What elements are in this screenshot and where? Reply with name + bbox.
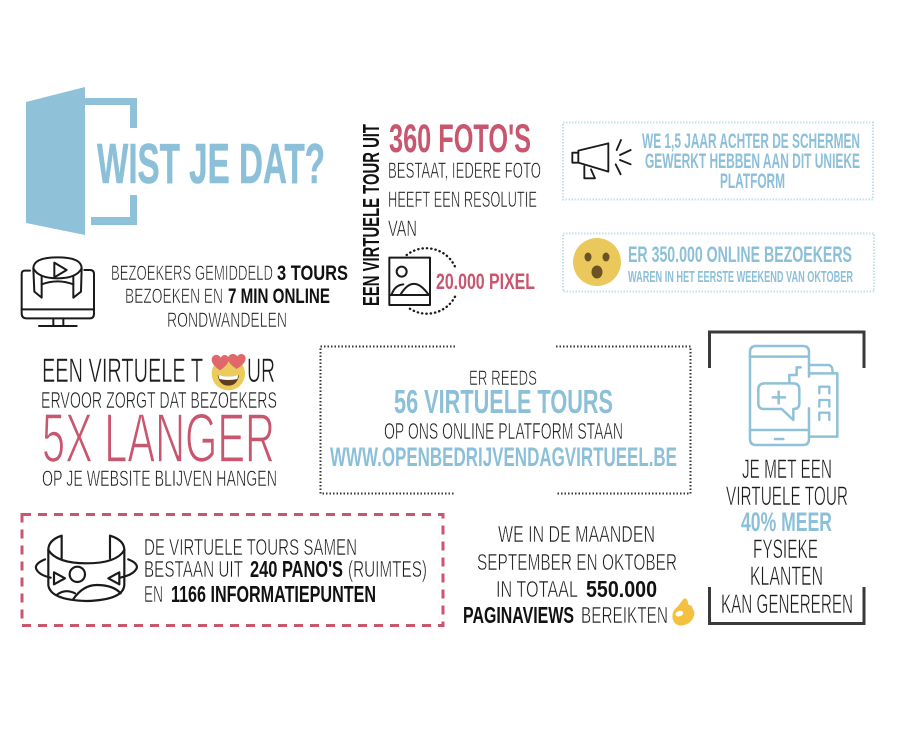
text: een virtuele tour block: EEN VIRTUELE T (42, 352, 203, 390)
panel: online visitors (563, 234, 874, 292)
text: pageviews (463, 521, 677, 628)
icon: phone with chat bubble (750, 346, 837, 445)
text: 360 photos: 360 FOTO'S (389, 117, 531, 161)
text: een virtuele tour block: 5X LANGER (42, 399, 275, 477)
panel: pano's and info points: (RUIMTES) (348, 556, 427, 582)
text: visitors average: BEZOEKERS GEMIDDELD (111, 262, 273, 285)
panel: pano's and info points: 240 PANO'S (250, 556, 343, 582)
vertical heading: een virtuele tour uit: EEN VIRTUELE TOUR UIT (358, 124, 384, 306)
icon: 360 panorama band (36, 536, 137, 601)
text: 360 photos: HEEFT EEN RESOLUTIE (388, 187, 537, 212)
title: WIST JE DAT? (97, 132, 325, 196)
text: 360 photos: BESTAAT, IEDERE FOTO (388, 158, 541, 183)
text: pageviews: WE IN DE MAANDEN (498, 521, 655, 547)
text: 20.000 pixel: 20.000 PIXEL (436, 269, 535, 294)
panel: pano's and info points: BESTAAN UIT (144, 556, 243, 582)
panel: 56 virtuele tours: 56 VIRTUELE TOURS (394, 383, 613, 420)
text: visitors average: 3 TOURS (277, 262, 348, 285)
text: visitors average: RONDWANDELEN (167, 309, 287, 332)
panel: behind the scenes (563, 122, 873, 200)
panel: pano's and info points (22, 514, 443, 626)
text: een virtuele tour block (41, 352, 277, 491)
panel: pano's and info points: DE VIRTUELE TOURS SAMEN (144, 534, 357, 560)
text: pageviews: PAGINAVIEWS (463, 602, 574, 628)
panel: 56 virtuele tours: WWW.OPENBEDRIJVENDAGVIRTUEEL.BE (330, 442, 677, 472)
icon: open door (26, 87, 137, 235)
panel: 56 virtuele tours: OP ONS ONLINE PLATFORM STAAN (384, 418, 623, 444)
text: pageviews: BEREIKTEN (581, 602, 668, 628)
panel: behind the scenes: PLATFORM (720, 170, 785, 193)
text: 360 photos: VAN (388, 216, 417, 241)
text: een virtuele tour block: OP JE WEBSITE BLIJVEN HANGEN (42, 466, 277, 491)
panel: pano's and info points: EN (144, 581, 163, 607)
panel: 40% more customers: KLANTEN (750, 561, 823, 591)
text: 360 photos (388, 117, 541, 241)
icon: heart eyes emoji (212, 354, 246, 390)
text: visitors average (111, 262, 348, 332)
text: pageviews: SEPTEMBER EN OKTOBER (477, 549, 677, 575)
text: pageviews: 550.000 (586, 576, 657, 602)
text: visitors average: 7 MIN ONLINE (228, 285, 330, 308)
panel: 56 virtuele tours (320, 346, 690, 494)
text: visitors average: BEZOEKEN EN (125, 285, 223, 308)
panel: 40% more customers: JE MET EEN (742, 454, 832, 484)
text: een virtuele tour block: ERVOOR ZORGT DAT BEZOEKERS (41, 387, 277, 413)
icon: ok hand emoji (672, 598, 694, 626)
icon: photo with dotted circle (389, 248, 455, 314)
panel: 40% more customers: FYSIEKE (753, 534, 818, 564)
text: pageviews: IN TOTAAL (496, 576, 578, 602)
icon: megaphone (572, 140, 631, 178)
icon: surprised emoji (573, 238, 621, 286)
panel: 40% more customers: 40% MEER (741, 507, 832, 537)
panel: 56 virtuele tours: ER REEDS (469, 367, 537, 390)
panel: pano's and info points: 1166 INFORMATIEPUNTEN (171, 581, 376, 607)
text: een virtuele tour block: UR (247, 352, 275, 390)
icon: monitor with virtual tour (22, 257, 94, 326)
panel: 40% more customers (710, 332, 864, 624)
